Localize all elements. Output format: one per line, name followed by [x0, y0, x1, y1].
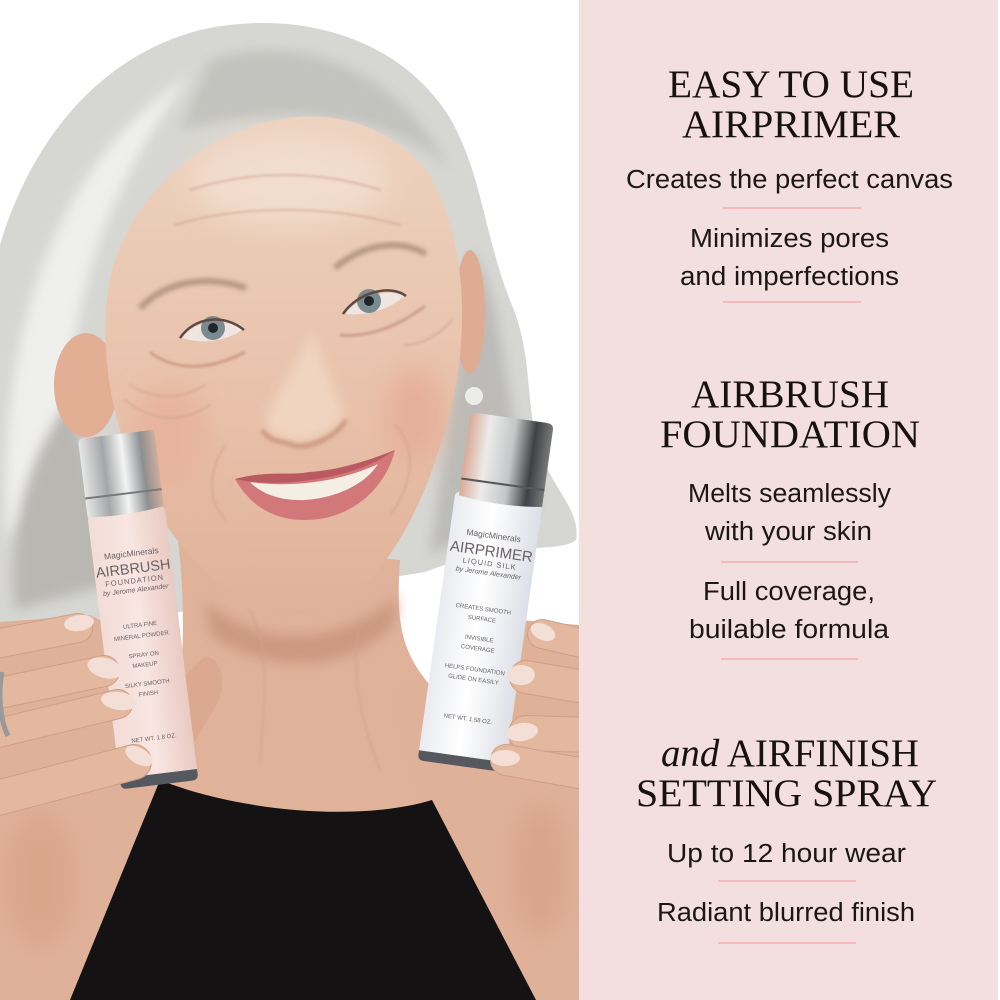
- wrinkles: [125, 173, 453, 518]
- text: up to 12 hour wear: Up to 12 hour wear: [667, 840, 907, 868]
- bottle: airbrush foundation: SILKY SMOOTH: [125, 679, 170, 690]
- panel: product benefits: [579, 0, 1000, 1000]
- bottle: airbrush foundation: [78, 429, 198, 789]
- bottle: airprimer liquid silk: SURFACE: [467, 615, 496, 625]
- text: minimizes pores and imperfections: [680, 225, 899, 291]
- bottle: airbrush foundation: ULTRA FINE: [123, 621, 158, 631]
- bottle: airbrush foundation: AIRBRUSH: [95, 557, 171, 582]
- text: melts seamlessly with your skin: with your skin: [704, 518, 872, 546]
- bottle: airbrush foundation: FOUNDATION: [105, 573, 164, 589]
- section: airbrush foundation: [660, 373, 920, 659]
- bottle: airbrush foundation: by Jerome Alexander: [103, 583, 170, 598]
- left fingers: [0, 613, 156, 800]
- bottle: airprimer liquid silk: [418, 412, 554, 772]
- heading: airbrush foundation: FOUNDATION: [660, 413, 920, 456]
- bottle: airbrush foundation: SPRAY ON: [128, 651, 159, 660]
- bottle: airbrush foundation: FINISH: [138, 690, 159, 698]
- bottle: airprimer liquid silk: AIRPRIMER: [449, 538, 534, 566]
- bottle: airprimer liquid silk: CREATES SMOOTH: [455, 603, 511, 617]
- bottle: airprimer liquid silk: INVISIBLE: [464, 635, 494, 644]
- black top: [70, 780, 536, 1000]
- bottle: airprimer liquid silk: MagicMinerals: [466, 527, 521, 544]
- bottle: airprimer liquid silk: GLIDE ON EASILY: [448, 674, 499, 687]
- earring: [465, 387, 483, 405]
- heading: and airfinish setting spray: and AIRFINISH: [661, 732, 919, 775]
- bottle: airprimer liquid silk: HELPS FOUNDATION: [444, 663, 505, 677]
- heading: and airfinish setting spray: SETTING SPRAY: [636, 772, 937, 815]
- heading: easy to use airprimer: AIRPRIMER: [682, 103, 900, 146]
- section: airfinish setting spray: [636, 732, 937, 943]
- bottle: airbrush foundation: NET WT. 1.8 OZ.: [131, 733, 177, 745]
- bottle: airbrush foundation: MAKEUP: [132, 661, 158, 670]
- neck: [178, 541, 428, 812]
- text: full coverage, builable formula: [689, 578, 890, 644]
- text: minimizes pores and imperfections: Minimizes pores: [690, 225, 889, 253]
- bottle: airprimer liquid silk: NET WT. 1.58 OZ.: [443, 713, 493, 726]
- section: airprimer: [626, 63, 953, 302]
- text: full coverage, builable formula: builable formula: [689, 616, 890, 644]
- hair: [0, 23, 577, 625]
- left hand: [0, 615, 222, 1000]
- bottle: airprimer liquid silk: by Jerome Alexander: [455, 566, 522, 582]
- photo: woman holding two bottles: [0, 0, 590, 1000]
- bottle: airbrush foundation: MagicMinerals: [103, 545, 159, 562]
- heading: airbrush foundation: [660, 373, 920, 456]
- text: creates the perfect canvas: Creates the perfect canvas: [626, 166, 953, 194]
- eyebrows and eyes: [140, 245, 426, 366]
- text: melts seamlessly with your skin: [688, 480, 891, 546]
- face: [105, 116, 462, 559]
- ear left: [54, 333, 118, 437]
- heading: airbrush foundation: AIRBRUSH: [691, 373, 889, 416]
- right hand: [438, 620, 579, 1000]
- nose: [265, 330, 345, 441]
- heading: easy to use airprimer: [668, 63, 914, 146]
- text: minimizes pores and imperfections: and imperfections: [680, 263, 899, 291]
- text: melts seamlessly with your skin: Melts seamlessly: [688, 480, 891, 508]
- ear right: [459, 250, 485, 374]
- heading: and airfinish setting spray: [636, 732, 937, 815]
- bottle: airbrush foundation: MINERAL POWDER: [114, 630, 170, 643]
- heading: easy to use airprimer: EASY TO USE: [668, 63, 914, 106]
- right fingers: [490, 619, 590, 775]
- mouth: [235, 450, 395, 520]
- bottle: airprimer liquid silk: LIQUID SILK: [462, 556, 517, 572]
- text: full coverage, builable formula: Full coverage,: [703, 578, 875, 606]
- bottle: airprimer liquid silk: COVERAGE: [460, 644, 495, 655]
- text: radiant blurred finish: Radiant blurred finish: [657, 899, 915, 927]
